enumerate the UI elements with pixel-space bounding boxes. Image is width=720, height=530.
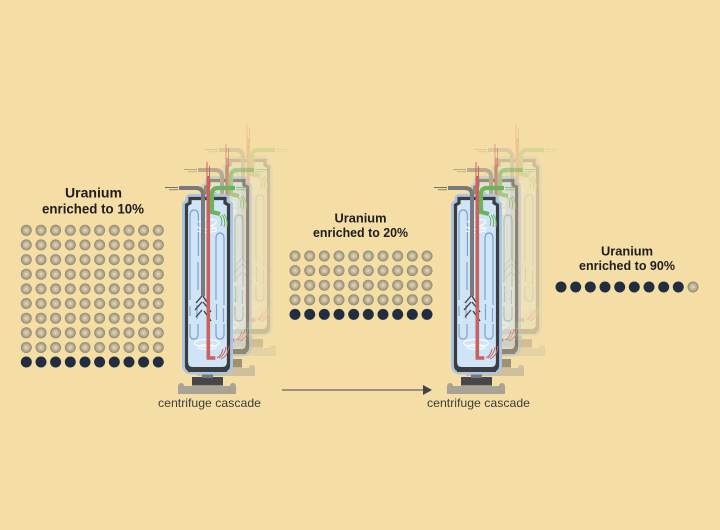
heading: enriched to 10% <box>42 186 144 216</box>
arrow: cascade to cascade <box>282 385 432 395</box>
icon: first centrifuge cascade <box>165 124 289 394</box>
heading: enriched to 90% <box>579 244 675 273</box>
panel: uranium enriched to 10% <box>21 186 164 368</box>
dot grid: 40 natural, 10 enriched <box>290 250 432 320</box>
heading: enriched to 20%: Uranium <box>334 212 386 226</box>
dot row: 9 enriched, 1 natural <box>556 282 698 292</box>
dot grid: 90 natural, 10 enriched <box>21 225 164 368</box>
label: second centrifuge cascade: centrifuge cascade <box>427 396 530 410</box>
heading: enriched to 20% <box>313 212 408 240</box>
label: first centrifuge cascade: centrifuge cascade <box>158 396 261 410</box>
icon: second centrifuge cascade <box>434 124 558 394</box>
heading: enriched to 90%: enriched to 90% <box>579 259 675 273</box>
panel: uranium enriched to 20% <box>290 212 432 320</box>
heading: enriched to 90%: Uranium <box>601 244 653 258</box>
heading: enriched to 20%: enriched to 20% <box>313 226 408 240</box>
heading: enriched to 10%: enriched to 10% <box>42 202 144 216</box>
panel: uranium enriched to 90% <box>556 244 698 292</box>
heading: enriched to 10%: Uranium <box>65 186 122 200</box>
